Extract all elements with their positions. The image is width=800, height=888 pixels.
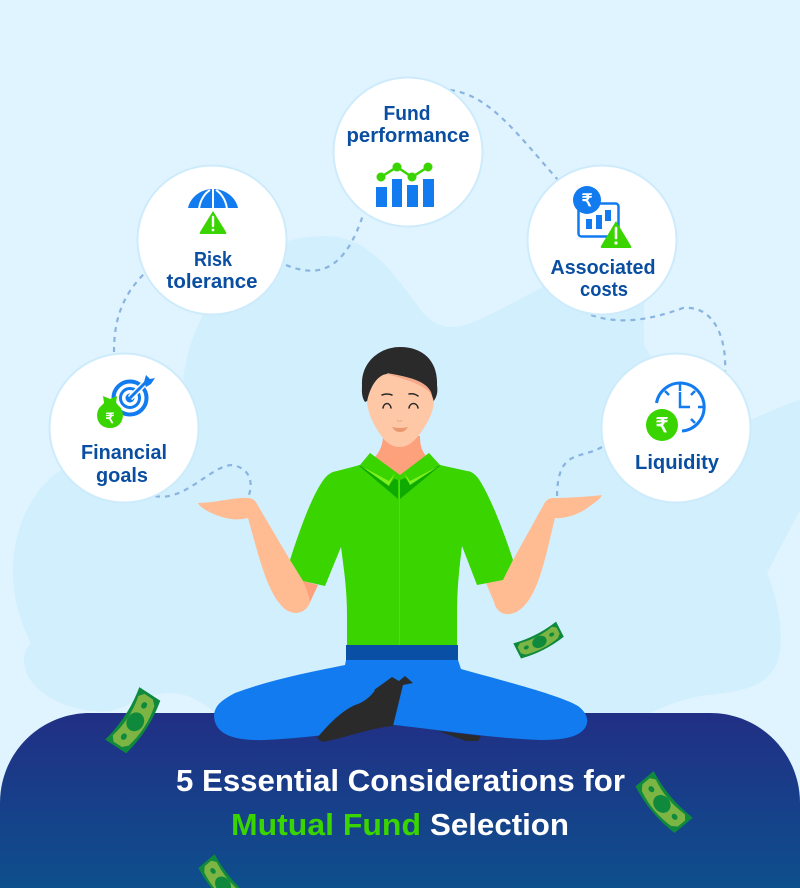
title: 5 Essential Considerations for: [176, 763, 625, 798]
label: Financial: [81, 442, 167, 464]
face: [367, 374, 434, 447]
icon: umbrella and warning: [188, 189, 238, 234]
dashed connector: associated costs to liquidity: [591, 308, 725, 372]
dashed connector: fund performance to associated costs: [450, 90, 558, 180]
title: Mutual Fund: [231, 807, 421, 842]
label: Liquidity: [635, 452, 720, 474]
icon: rupee chart and warning: ₹: [582, 191, 593, 210]
dashed connector: financial goals to hand: [155, 465, 251, 498]
label: Associated: [550, 257, 656, 279]
icon: money bag and target: ₹: [106, 410, 115, 426]
panel: fund performance: [334, 78, 482, 226]
money: right: [633, 771, 693, 835]
collar: [361, 453, 439, 485]
label: Fund: [384, 103, 430, 125]
panel: associated costs: costs: [580, 279, 628, 301]
title: Selection: [430, 807, 569, 842]
dashed connector: financial goals to risk tolerance: [114, 272, 146, 352]
money: bottom: [196, 854, 252, 888]
panel: fund performance: performance: [346, 125, 470, 147]
panel: risk tolerance: tolerance: [166, 271, 258, 293]
belt: [346, 645, 458, 660]
hair: [362, 347, 437, 402]
bottom title band: [0, 713, 800, 888]
collar highlight: [361, 466, 439, 486]
forehead shadow: [387, 373, 434, 402]
background blob: [13, 236, 800, 713]
icon: clock and rupee coin: ₹: [656, 415, 669, 437]
back foot: [438, 731, 481, 741]
eyes and brows: [382, 394, 418, 408]
person: [198, 347, 602, 742]
left underarm shade: [303, 581, 318, 602]
neck: [374, 436, 428, 478]
dashed connector: liquidity to hand: [557, 447, 602, 498]
icon: bar and line chart: [376, 162, 434, 207]
title: [176, 763, 625, 842]
right arm: [486, 495, 602, 614]
money: near hand: [513, 622, 565, 661]
label: Risk: [194, 249, 233, 271]
shirt placket: [398, 480, 400, 646]
icon: money bag and target: [97, 375, 155, 428]
panel: associated costs: [528, 166, 676, 314]
money: left: [105, 687, 163, 755]
panel: liquidity: [602, 354, 750, 502]
shirt: [290, 453, 513, 646]
panel: financial goals: [50, 354, 198, 502]
icon: rupee chart and warning: [573, 186, 631, 248]
collar shadow: [358, 465, 441, 499]
nose: [397, 420, 402, 422]
panel: risk tolerance: [138, 166, 286, 314]
icon: clock and rupee coin: [646, 383, 704, 441]
left arm: [198, 498, 318, 613]
panel: financial goals: goals: [96, 465, 148, 487]
dashed connector: risk tolerance to fund performance: [286, 212, 364, 271]
legs: [214, 660, 587, 740]
front foot: [317, 676, 413, 742]
mouth: [392, 427, 408, 432]
